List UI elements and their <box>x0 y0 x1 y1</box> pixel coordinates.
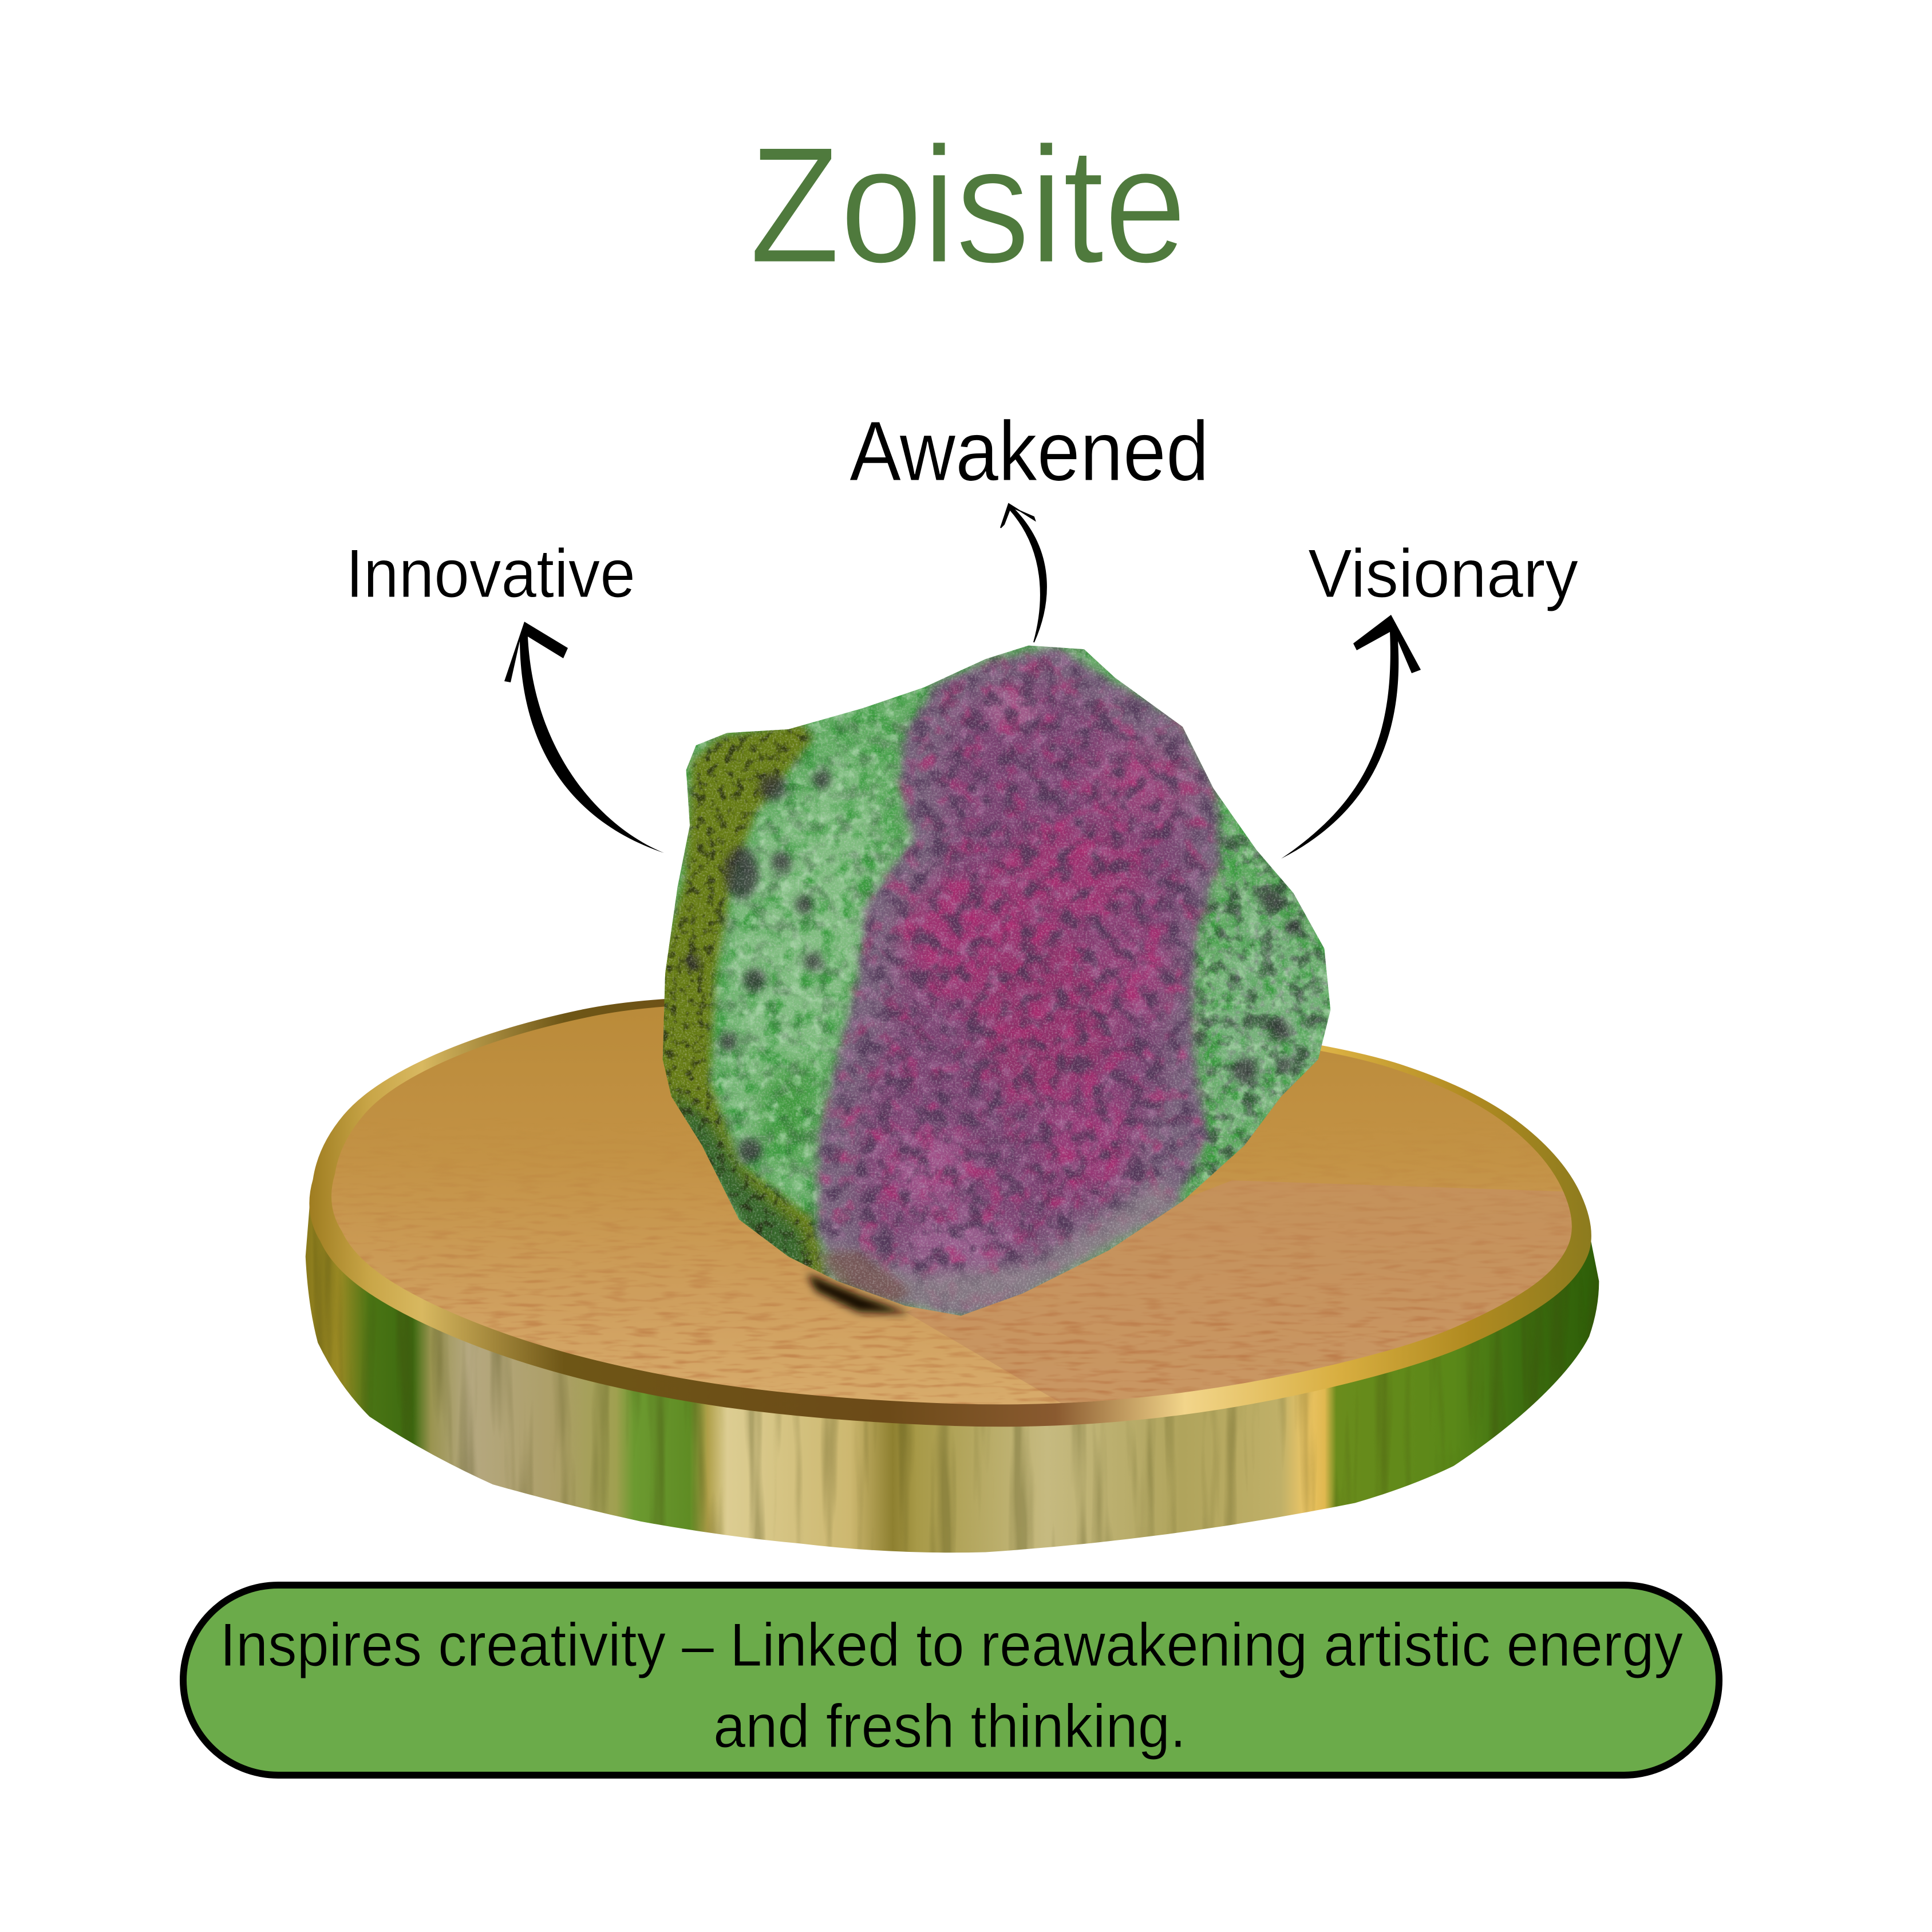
rock surface grain <box>653 635 1340 1322</box>
green base <box>653 635 1340 1322</box>
wood top face <box>331 1006 1572 1405</box>
arrow: to Innovative <box>504 622 664 853</box>
callout line 2: and fresh thinking. <box>713 1692 1186 1760</box>
olive weathered edge <box>663 724 831 1278</box>
dark inclusions <box>685 771 1302 1163</box>
arrow: to Awakened <box>1001 504 1046 642</box>
pill shape <box>183 1585 1719 1775</box>
brass side wall <box>303 1195 1609 1557</box>
wooden and brass stand <box>303 985 1609 1557</box>
zoisite rock <box>653 635 1340 1322</box>
purple mottling <box>801 635 1236 1322</box>
magenta highlights <box>882 687 1191 1274</box>
label: Innovative: Innovative <box>346 535 635 612</box>
label: Visionary: Visionary <box>1308 535 1578 612</box>
panel: zoisite infographic <box>180 143 1722 1779</box>
rock contact shadow <box>807 1274 910 1314</box>
arrow: to Visionary <box>1281 615 1421 859</box>
title: Zoisite <box>749 112 1187 298</box>
brass rim <box>309 996 1591 1427</box>
purple ruby zone <box>819 646 1219 1316</box>
callout line 1: Inspires creativity – Linked to reawakening artistic energy <box>220 1610 1683 1679</box>
callout pill <box>183 1585 1719 1775</box>
label: Awakened: Awakened <box>850 404 1209 499</box>
grey lower rim <box>824 1179 1185 1311</box>
